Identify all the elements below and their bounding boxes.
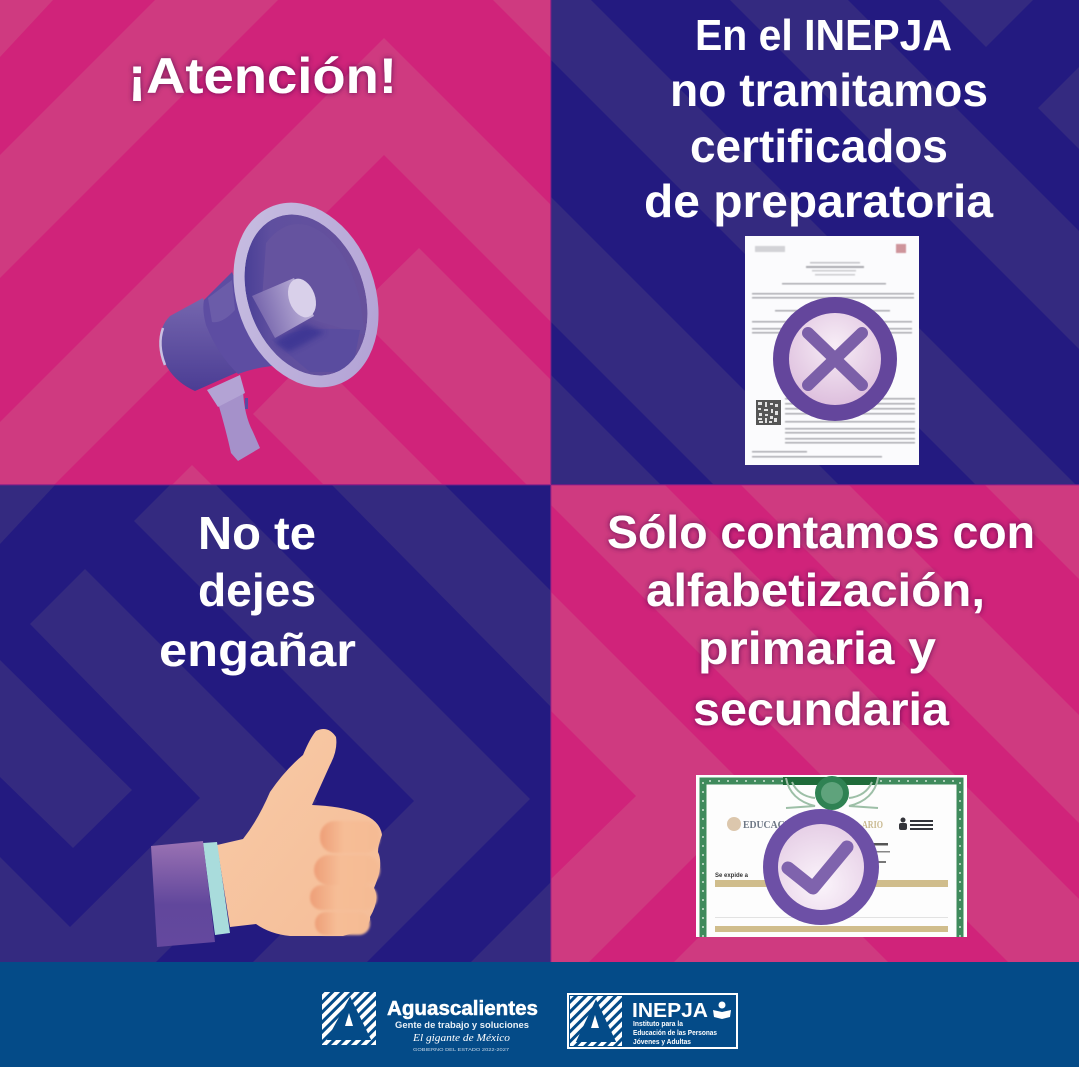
government line: GOBIERNO DEL ESTADO 2022-2027 [413,1047,510,1052]
institute name: Instituto para la [633,1019,684,1028]
heading: no te dejes engañar: engañar [159,624,356,676]
icon: people reading [713,1002,731,1019]
heading: sólo contamos con [607,506,1035,735]
heading: no tramitamos: En el INEPJA [695,11,952,60]
document: valid certificate [696,775,967,937]
footer band [0,962,1079,1067]
heading: no tramitamos: certificados [690,120,948,172]
tagline: El gigante de México [412,1032,511,1044]
heading: sólo contamos con: secundaria [693,683,949,735]
panel: what we offer [551,484,1079,962]
expedition line: Se expide a [715,873,749,879]
neck [203,272,272,374]
rim [234,202,378,388]
heading: sólo contamos con: Sólo contamos con [607,506,1035,558]
black logo [899,818,933,830]
seal mark [727,817,741,831]
emblem: A [322,992,376,1045]
inner cylinder [252,278,314,338]
icon: thumbs up [151,729,382,947]
heading: no tramitamos [644,11,993,227]
emblem: A [570,996,622,1046]
heading: sólo contamos con: alfabetización, [646,564,985,616]
background chevrons: navy left [0,484,552,962]
seal and wings [786,776,878,810]
handle [207,375,260,461]
icon: megaphone [159,202,378,461]
wordmark: INEPJA [632,1000,708,1022]
logo: Aguascalientes [322,992,538,1052]
document: high school certificate [745,236,919,465]
wordmark: Aguascalientes [387,998,538,1020]
logo text: EDUCACIÓN [743,819,803,831]
icon: check in circle [763,809,879,925]
slogan: Gente de trabajo y soluciones [395,1020,529,1031]
institute name: Jóvenes y Adultas [633,1037,691,1046]
logo text [743,821,883,828]
background chevrons: pink [0,0,550,484]
green ornamental border [703,781,960,937]
panel: attention [0,0,551,485]
heading: no tramitamos: de preparatoria [644,175,993,227]
institute name [633,1019,717,1046]
background chevrons: pink bottom right [551,484,1079,962]
logo text: ARIO [862,819,883,831]
qr code [756,400,781,425]
icon: x in circle [773,297,897,421]
heading: ¡Atención!: ¡Atención! [128,48,397,104]
background chevrons: navy top right [551,0,1079,488]
heading: no te dejes engañar [159,507,356,676]
back cylinder [160,298,238,391]
fingers [310,821,380,935]
heading: no tramitamos: no tramitamos [670,64,988,116]
institute name: Educación de las Personas [633,1028,717,1037]
heading: sólo contamos con: primaria y [698,622,936,674]
panel: do not be fooled [0,484,552,962]
panel: no certificates [551,0,1079,488]
heading: no te dejes engañar: No te [198,507,316,559]
heading: no te dejes engañar: dejes [198,564,316,616]
logo: INEPJA [568,994,737,1048]
bell interior [244,214,368,376]
